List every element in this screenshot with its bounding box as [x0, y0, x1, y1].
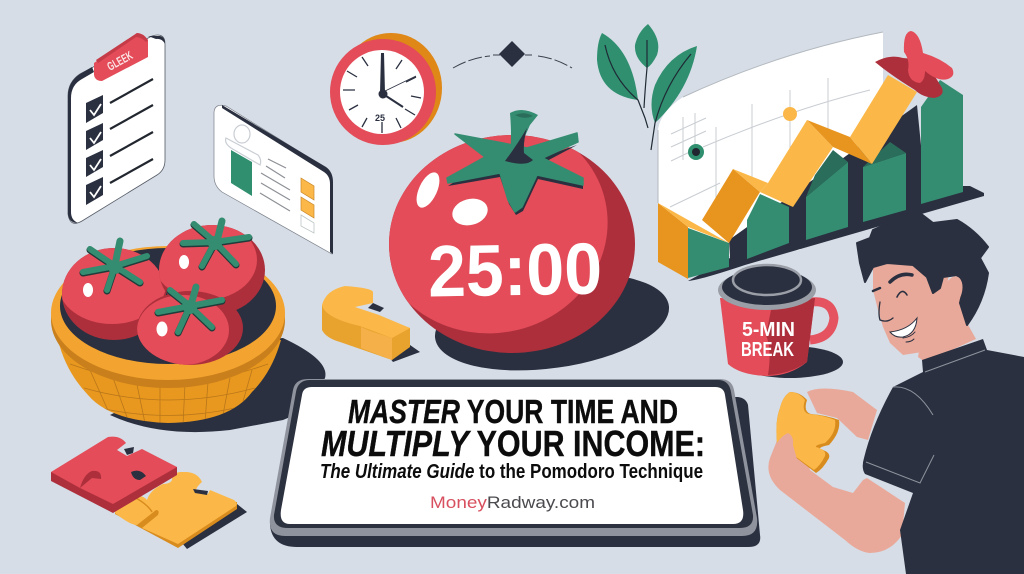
big tomato timer: [389, 110, 669, 370]
mug handle: [810, 302, 834, 340]
title headline: MASTER YOUR TIME AND: [348, 393, 678, 430]
basket of tomatoes: [51, 220, 325, 432]
title headline: MULTIPLY YOUR INCOME:: [321, 423, 705, 464]
icon: green leaves: [597, 24, 697, 150]
panel dark frame: [274, 380, 753, 528]
icon: small orange blocks: [322, 286, 420, 362]
timer text: 25:00: [427, 228, 603, 313]
checkbox rows: [86, 79, 153, 205]
clipboard tab: [94, 33, 148, 81]
yellow puzzle piece: [115, 472, 247, 549]
tomato ground shadow: [429, 260, 675, 384]
person arm: [768, 433, 905, 553]
panel dark base: [270, 397, 760, 547]
red puzzle piece: [51, 437, 177, 513]
person upper hand: [807, 388, 877, 440]
title headline: [321, 393, 705, 464]
person features: [873, 274, 915, 342]
chart dark base: [688, 105, 984, 281]
person neck: [918, 285, 976, 362]
tomato calyx: [447, 110, 583, 215]
icon: profile card: [214, 105, 333, 254]
panel white screen: [281, 387, 743, 524]
basket ground shadow: [110, 338, 325, 432]
basket rim: [51, 252, 285, 388]
chart white panel: [658, 32, 883, 262]
coffee mug: [718, 265, 843, 378]
panel grey edge: [270, 379, 757, 536]
mug label: [741, 319, 795, 361]
mug body: [718, 265, 816, 376]
icon: dashed arc with diamond: [453, 41, 572, 68]
person thumb: [770, 433, 800, 472]
mug shadow: [737, 346, 843, 378]
basket body: [58, 340, 281, 425]
site name: Money Radway.com: [430, 493, 595, 512]
card tags: [301, 178, 314, 233]
tomato right: [153, 220, 265, 315]
clipboard tab: GLEEK: [105, 48, 135, 74]
person face: [857, 213, 988, 355]
person hair: [857, 213, 988, 325]
chart bars: [688, 80, 963, 278]
icon: checklist clipboard: [68, 33, 165, 223]
tomato left: [58, 241, 166, 340]
tomato stem: [505, 110, 538, 164]
chart red arrow cap: [875, 31, 953, 98]
chart ribbon: [658, 75, 917, 279]
title panel: [270, 379, 760, 547]
card avatar: [226, 125, 261, 196]
tomato body: [389, 135, 635, 353]
chart: rising growth bars with ribbon: [658, 31, 984, 281]
mug label: 5-MIN: [742, 319, 795, 341]
person ear: [940, 274, 966, 308]
icon: puzzle pieces on floor: [51, 437, 247, 549]
person shirt: [863, 339, 1024, 574]
tomato front: [137, 287, 243, 365]
clock ticks and hands: 25: [375, 113, 385, 123]
person with puzzle piece: [768, 213, 1024, 574]
basket inside: [60, 248, 276, 364]
puzzle piece in hand: [776, 392, 839, 473]
title subtitle: The Ultimate Guide to the Pomodoro Technique: [320, 461, 703, 483]
icon: wall clock: [330, 33, 442, 145]
mug label: BREAK: [741, 339, 794, 361]
